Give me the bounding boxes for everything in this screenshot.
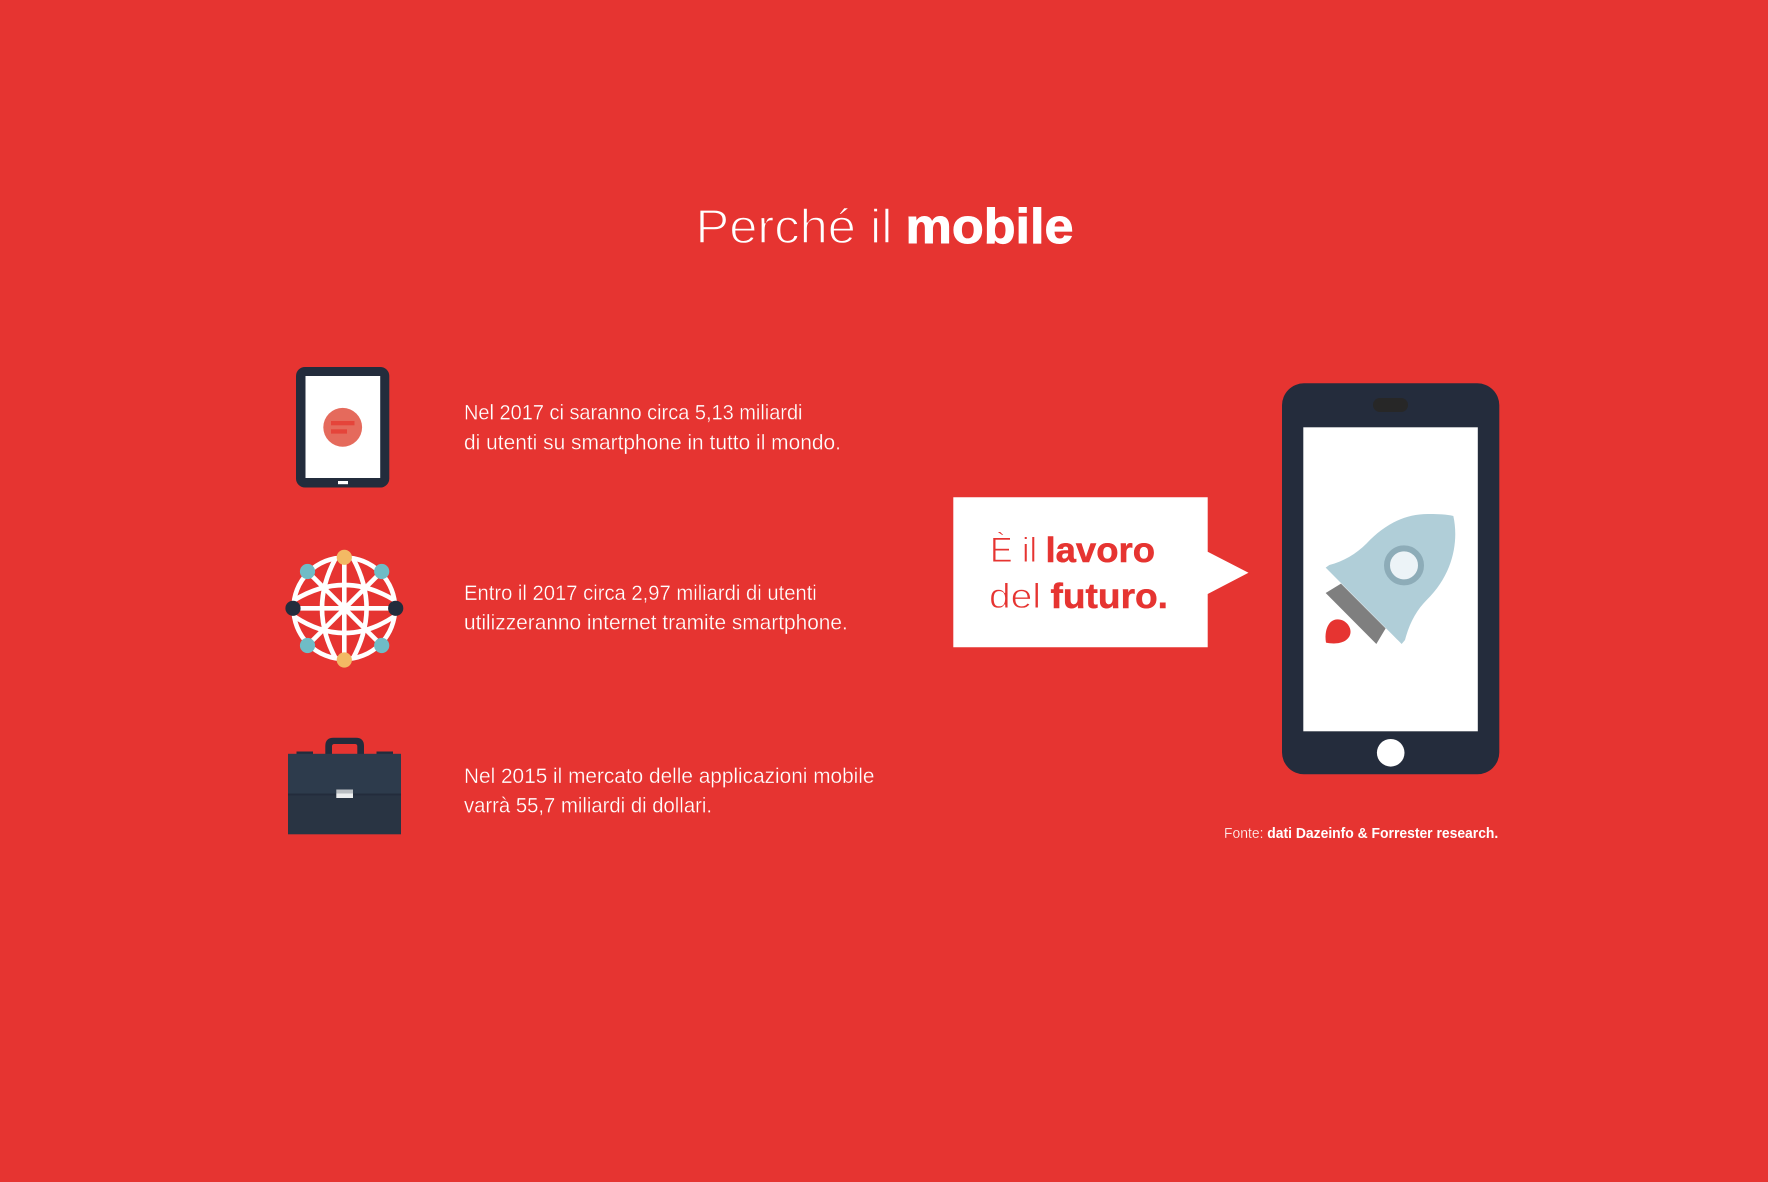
text: mobile app market [464, 765, 874, 818]
smartphone illustration [1282, 383, 1499, 774]
icon: rocket [1326, 514, 1455, 644]
text: smartphone users [464, 402, 841, 454]
text: mobile app market: Nel 2015 il mercato delle applicazioni mobile [464, 765, 874, 788]
callout: speech bubble: È il [990, 531, 1037, 570]
icon: tablet [296, 367, 389, 488]
title: Perché il [696, 201, 892, 254]
source note: Fonte: [1224, 825, 1264, 842]
callout: speech bubble: futuro. [1050, 577, 1168, 616]
icon: briefcase [288, 738, 401, 834]
title: mobile [906, 200, 1074, 254]
callout: speech bubble [953, 497, 1248, 647]
callout: speech bubble: del [989, 577, 1041, 616]
text: internet users: utilizzeranno internet tramite smartphone. [464, 612, 848, 634]
text: smartphone users: Nel 2017 ci saranno circa 5,13 miliardi [464, 402, 802, 424]
title [696, 200, 1074, 254]
callout: speech bubble: lavoro [1046, 531, 1155, 570]
icon: network globe [285, 550, 403, 668]
text: internet users [464, 582, 848, 634]
text: internet users: Entro il 2017 circa 2,97 miliardi di utenti [464, 582, 817, 605]
text: smartphone users: di utenti su smartphone in tutto il mondo. [464, 431, 841, 454]
text: mobile app market: varrà 55,7 miliardi di dollari. [464, 794, 712, 818]
source note: dati Dazeinfo & Forrester research. [1267, 825, 1498, 842]
